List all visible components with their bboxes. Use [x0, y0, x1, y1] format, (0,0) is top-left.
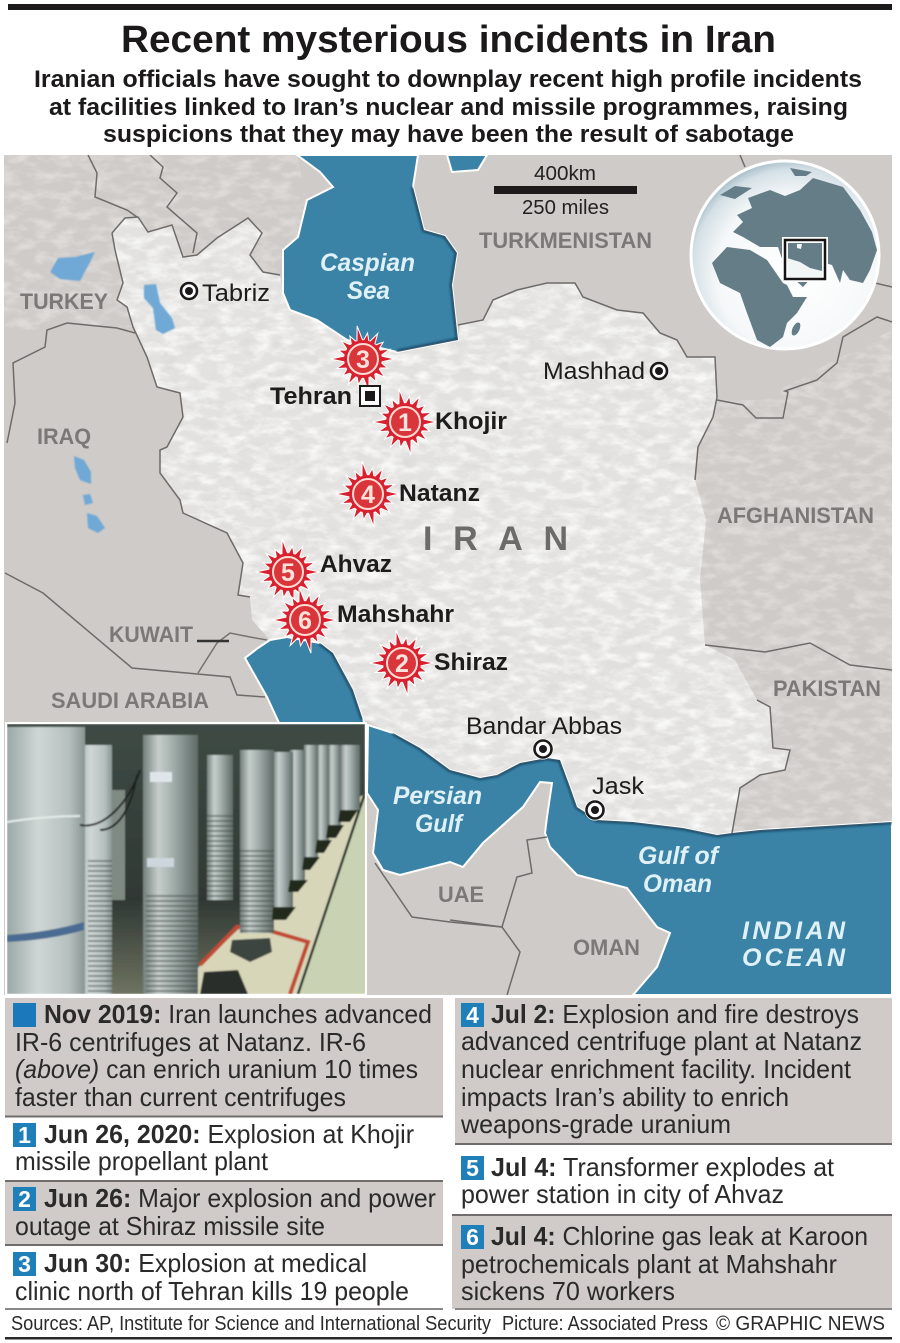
explosion marker 1	[372, 389, 436, 455]
incident 1	[13, 1119, 414, 1176]
explosion marker 5: 5	[281, 559, 295, 587]
panel: Nov 2019: (above) can enrich uranium 10 times	[15, 1054, 418, 1084]
incident 4	[455, 998, 892, 1145]
incident 4: Jul 2: Explosion and fire destroys	[491, 999, 859, 1029]
country labels: AFGHANISTAN	[717, 503, 874, 528]
land base	[4, 155, 892, 995]
lakes	[50, 252, 175, 533]
incident 5: Jul 4: Transformer explodes at	[491, 1152, 835, 1182]
scale bar	[494, 165, 637, 214]
incident 3: clinic north of Tehran kills 19 people	[15, 1276, 409, 1306]
incident 3: Jun 30: Explosion at medical	[44, 1248, 367, 1278]
explosion marker 5	[255, 539, 320, 605]
country labels	[20, 228, 881, 960]
explosion marker 2: 2	[395, 650, 409, 678]
explosion marker 2	[369, 630, 434, 696]
country labels: TURKMENISTAN	[479, 228, 652, 253]
scale bar: 250 miles	[522, 197, 609, 219]
country labels: KUWAIT	[109, 622, 194, 647]
sea labels: Persian	[393, 782, 482, 810]
sea labels	[320, 249, 846, 972]
globe continents	[712, 168, 877, 347]
incident 1: Jun 26, 2020: Explosion at Khojir	[44, 1119, 414, 1149]
incident 1: missile propellant plant	[15, 1146, 269, 1176]
distant centrifuges	[100, 745, 360, 933]
site labels	[320, 408, 508, 676]
country labels: PAKISTAN	[773, 676, 881, 701]
centrifuge bases	[272, 810, 358, 920]
incident 2: 2	[18, 1186, 31, 1212]
country labels: IRAQ	[37, 424, 91, 449]
top rule	[8, 4, 892, 10]
site labels: Ahvaz	[320, 551, 392, 578]
footer: sources and credits: © GRAPHIC NEWS	[716, 1313, 885, 1335]
city: Tehran	[270, 385, 381, 407]
city: Mashhad: Mashhad	[543, 358, 645, 385]
site labels: Khojir	[435, 408, 507, 435]
city: Mashhad	[545, 362, 668, 380]
explosion marker 4: 4	[361, 481, 375, 509]
floor safety lines	[200, 927, 308, 994]
incident 6: Jul 4: Chlorine gas leak at Karoon	[491, 1221, 868, 1251]
site labels: Natanz	[399, 480, 480, 507]
incident 5: 5	[466, 1155, 479, 1181]
city: Bandar Abbas	[466, 713, 622, 760]
incident 6: sickens 70 workers	[461, 1276, 675, 1306]
scale bar: 400km	[534, 163, 596, 185]
cabling	[80, 770, 140, 830]
country labels: UAE	[438, 882, 484, 907]
city: Bandar Abbas: Bandar Abbas	[466, 713, 622, 740]
subtitle: Iranian officials have sought to downplay recent high profile incidents	[34, 66, 862, 93]
subtitle: suspicions that they may have been the result of sabotage	[103, 121, 794, 148]
incident 6	[452, 1214, 892, 1310]
panel: Nov 2019: IR-6 centrifuges at Natanz. IR-6	[15, 1027, 366, 1057]
explosion marker 4	[335, 461, 400, 527]
sea labels: Gulf of	[638, 842, 721, 870]
country labels: TURKEY	[20, 289, 108, 314]
explosion marker 3: 3	[356, 346, 370, 374]
sea labels: Sea	[347, 277, 390, 305]
explosion marker 1: 1	[398, 409, 412, 437]
city: Jask	[584, 773, 645, 820]
relief of neighbouring countries	[4, 155, 892, 832]
explosion marker 6: 6	[298, 607, 312, 635]
country borders	[5, 155, 892, 995]
subtitle	[34, 66, 862, 148]
incident 4: 4	[466, 1002, 479, 1028]
country labels: OMAN	[573, 935, 640, 960]
globe locator box	[785, 240, 825, 279]
subtitle: at facilities linked to Iran’s nuclear and missile programmes, raising	[49, 94, 848, 121]
incident 2: Jun 26: Major explosion and power	[44, 1183, 436, 1213]
incident 5: power station in city of Ahvaz	[461, 1179, 784, 1209]
sea labels: OCEAN	[742, 944, 846, 972]
incident 4: advanced centrifuge plant at Natanz	[461, 1026, 862, 1056]
incident 3	[5, 1248, 443, 1310]
incident 4: impacts Iran’s ability to enrich	[461, 1082, 789, 1112]
explosion marker 3	[330, 326, 394, 392]
seas	[245, 155, 892, 995]
incident 4: nuclear enrichment facility. Incident	[461, 1054, 852, 1084]
sea labels: INDIAN	[742, 917, 846, 945]
footer: sources and credits: Picture: Associated Press	[502, 1313, 708, 1335]
country labels: IRAN	[423, 520, 568, 558]
incident 6: petrochemicals plant at Mahshahr	[461, 1249, 837, 1279]
incident 3: 3	[18, 1251, 31, 1277]
Kuwait leader line	[197, 640, 229, 642]
incident 6: 6	[466, 1224, 479, 1250]
sea labels: Oman	[643, 870, 712, 898]
photo: IR-6 centrifuges	[5, 722, 367, 995]
footer: sources and credits	[5, 1313, 892, 1340]
city: Tehran: Tehran	[270, 383, 352, 410]
incident 5	[461, 1152, 835, 1209]
nearest centrifuges	[84, 744, 113, 994]
city: Tabriz: Tabriz	[202, 280, 270, 307]
Iran landmass	[113, 218, 789, 834]
floor	[298, 794, 366, 994]
locator globe	[691, 161, 879, 349]
sea labels: Caspian	[320, 249, 415, 277]
incident 2	[5, 1180, 443, 1246]
city: Jask: Jask	[592, 773, 645, 800]
sea labels: Gulf	[415, 810, 465, 838]
panel: Nov 2019: Nov 2019: Iran launches advanced	[44, 999, 432, 1029]
footer: sources and credits: Sources: AP, Institute for Science and International Security	[11, 1313, 491, 1335]
site labels: Mahshahr	[337, 601, 454, 628]
country labels: SAUDI ARABIA	[51, 688, 209, 713]
incident 4: weapons-grade uranium	[460, 1109, 731, 1139]
site labels: Shiraz	[434, 649, 508, 676]
city: Tabriz	[180, 282, 269, 301]
incident 1: 1	[18, 1122, 31, 1148]
panel: Nov 2019: faster than current centrifuges	[15, 1082, 346, 1112]
explosion marker 6	[272, 587, 336, 653]
blue marker	[13, 1003, 36, 1027]
title: Recent mysterious incidents in Iran	[121, 19, 776, 61]
incident 2: outage at Shiraz missile site	[15, 1211, 325, 1241]
panel: map	[4, 155, 892, 995]
panel: Nov 2019	[5, 998, 443, 1118]
